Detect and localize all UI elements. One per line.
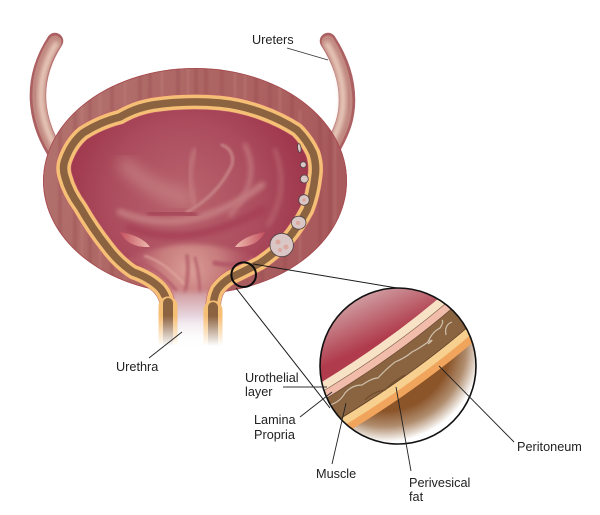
label: Lamina Propria: Propria (254, 428, 296, 442)
diagram: bladder (38, 41, 347, 360)
tumours (270, 143, 309, 257)
label: Perivesical fat (396, 387, 470, 504)
magnified wall section (319, 287, 477, 445)
label: Lamina Propria: Lamina (254, 413, 297, 427)
urothelial layer (322, 300, 445, 390)
muscle layer (328, 310, 466, 418)
right ureteral orifice (235, 232, 265, 247)
label: Perivesical fat: fat (409, 490, 424, 504)
label: Urothelial layer (245, 371, 327, 399)
label: Perivesical fat: Perivesical (409, 476, 470, 490)
left ureter (38, 41, 57, 150)
lumen red (320, 288, 437, 382)
label: Peritoneum (439, 366, 582, 454)
label: Ureters: Ureters (252, 33, 294, 47)
cover below urethra (145, 346, 235, 360)
urethra fade (145, 316, 235, 348)
urethra channel (172, 292, 209, 348)
bladder neck (125, 244, 258, 346)
leader lines from detail circle (236, 264, 397, 408)
urethra wall widening (168, 306, 213, 346)
inner bladder cavity (71, 110, 308, 332)
outer bladder wall (43, 65, 347, 295)
lamina propria (324, 304, 451, 398)
swirl folds (120, 145, 281, 236)
label: Muscle: Muscle (316, 467, 356, 481)
bladder wall layers (64, 102, 316, 346)
muscle vessels (330, 320, 452, 405)
label: Urothelial layer: layer (245, 385, 273, 399)
label: Ureters (252, 33, 328, 60)
perivesical fat layer (342, 329, 469, 424)
magnifier outline (320, 288, 476, 444)
label: Lamina Propria (254, 392, 332, 442)
label: Peritoneum: Peritoneum (517, 440, 582, 454)
trigone folds (144, 254, 253, 293)
label: Urothelial layer: Urothelial (245, 371, 299, 385)
detail selection circle (231, 262, 256, 287)
right ureter (327, 41, 347, 145)
label: Muscle (316, 403, 356, 481)
label: Urethra (116, 332, 182, 374)
peritoneum layer (347, 336, 472, 428)
label: Urethra: Urethra (116, 360, 159, 374)
left ureteral orifice (120, 232, 150, 247)
